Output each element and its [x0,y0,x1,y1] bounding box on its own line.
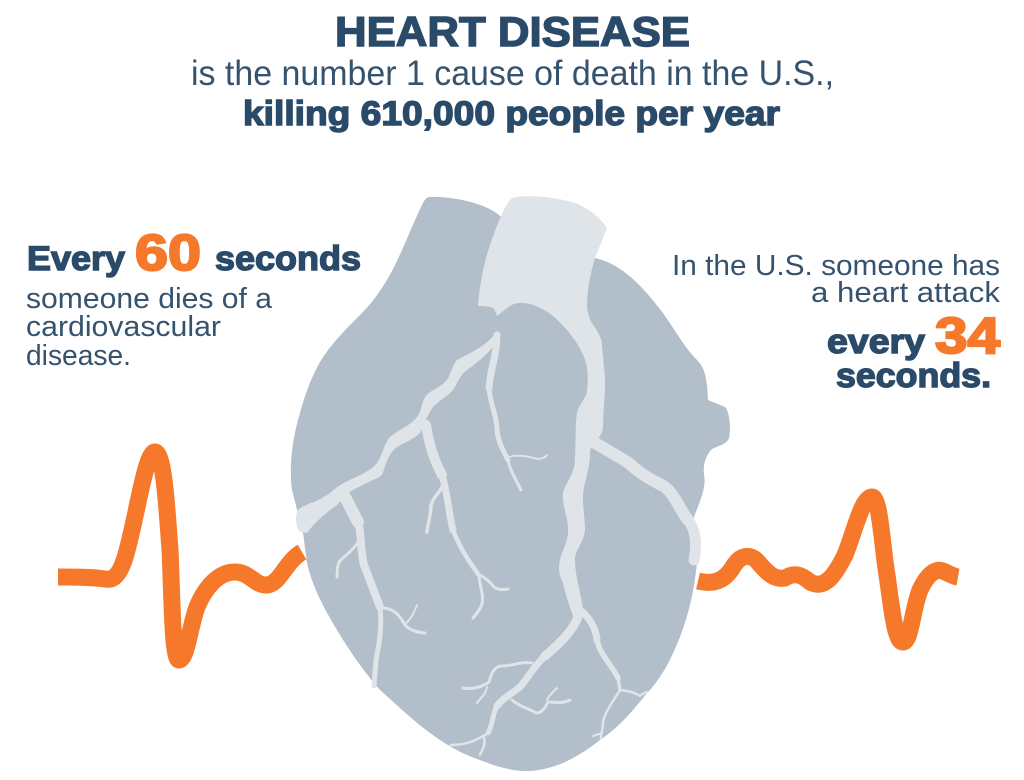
left callout: every 60 seconds: Every [27,240,125,278]
left callout: every 60 seconds: seconds [215,240,361,278]
right callout: every 34 seconds: In the U.S. someone has [672,250,1000,282]
right callout: every 34 seconds [672,250,1001,395]
left callout: every 60 seconds: someone dies of a [26,283,273,315]
heart illustration [291,196,730,771]
title: killing 610,000 people per year [243,95,780,133]
right callout: every 34 seconds: seconds. [836,357,991,395]
number 34: 34 [935,307,1001,364]
right callout: every 34 seconds: a heart attack [811,277,1001,309]
artery branches [337,335,696,755]
heart body [291,197,730,771]
title [191,8,834,133]
number 60: 60 [135,224,201,281]
left callout: every 60 seconds: disease. [26,340,131,372]
left coronary artery [296,331,497,533]
aorta and main artery [478,196,607,622]
left callout: every 60 seconds [26,224,361,372]
right callout: every 34 seconds: every [827,323,925,361]
title: is the number 1 cause of death in the U.S., [191,54,834,93]
left callout: every 60 seconds: cardiovascular [26,311,221,343]
title: HEART DISEASE [335,8,690,55]
right heartbeat line [698,497,958,642]
left heartbeat line [58,452,302,660]
